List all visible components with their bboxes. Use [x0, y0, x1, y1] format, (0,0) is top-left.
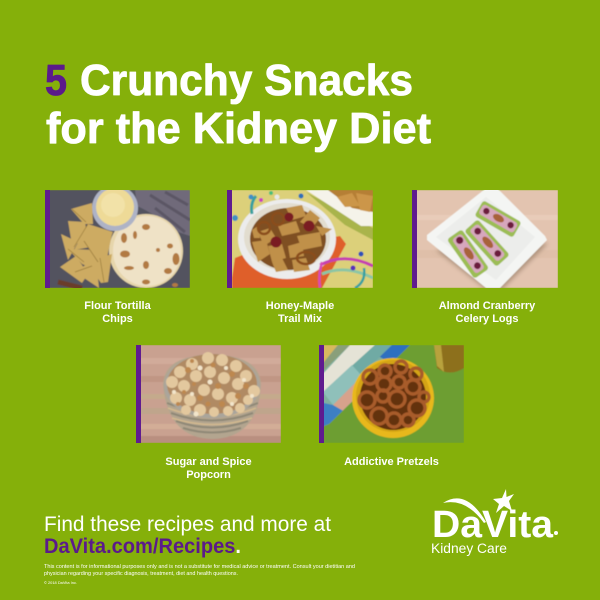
disclaimer — [44, 564, 355, 577]
caption: honey-maple trail mix: Honey-Maple — [266, 300, 334, 312]
accent bar — [45, 190, 50, 288]
plaid cloth — [324, 345, 410, 427]
chips — [60, 203, 113, 288]
photo: honey-maple trail mix — [227, 190, 373, 288]
copyright: © 2018 DaVita Inc. — [44, 580, 77, 585]
caption: flour tortilla chips: Flour Tortilla — [84, 300, 152, 312]
photo: sugar and spice popcorn — [136, 345, 281, 443]
caption: addictive pretzels: Addictive Pretzels — [344, 456, 439, 468]
tray — [306, 190, 373, 226]
ribbons — [320, 259, 373, 266]
photo: flour tortilla chips — [45, 185, 190, 288]
logo registered mark — [554, 531, 558, 535]
accent bar — [227, 190, 232, 288]
plate shadow — [436, 242, 548, 288]
call to action: Find these recipes and more at — [44, 513, 331, 536]
photo: addictive pretzels — [319, 345, 464, 443]
photo: almond cranberry celery logs — [417, 190, 558, 288]
celery log 2 — [464, 219, 510, 267]
title: 5 — [45, 56, 67, 105]
logo wordmark: DaVita — [432, 504, 554, 546]
caption: sugar and spice popcorn: Sugar and Spice — [165, 456, 252, 468]
disclaimer: physician regarding your specific diagnosis, treatment, diet and health questions. — [44, 571, 238, 577]
celery log 3 — [447, 229, 489, 279]
title: Crunchy Snacks — [80, 56, 413, 105]
caption line 2: Chips — [102, 313, 133, 325]
caption line 2: Celery Logs — [456, 313, 518, 325]
recipes link: DaVita.com/Recipes. — [44, 535, 241, 558]
logo star — [493, 489, 514, 513]
caption: almond cranberry celery logs: Almond Cranberry — [439, 300, 536, 312]
title — [45, 56, 431, 153]
accent bar — [136, 345, 141, 443]
celery log 1 — [474, 200, 522, 238]
plate — [427, 189, 547, 288]
bowl — [163, 355, 261, 439]
caption line 2: Trail Mix — [278, 313, 323, 325]
tortilla — [109, 214, 183, 288]
caption line 2: Popcorn — [186, 469, 231, 481]
logo swoosh — [443, 498, 486, 523]
accent bar — [319, 345, 324, 443]
accent bar — [412, 190, 417, 288]
logo: DaVita Kidney Care — [431, 489, 558, 556]
bowl — [92, 185, 138, 231]
glass — [434, 345, 464, 372]
bowl — [238, 199, 336, 279]
pretzels — [359, 361, 429, 427]
logo sub-brand: Kidney Care — [431, 541, 507, 556]
disclaimer: This content is for informational purposes only and is not a substitute for medical advice or treatment. Consult your dietitian and — [44, 564, 355, 570]
bowl — [352, 358, 434, 438]
title: for the Kidney Diet — [46, 104, 431, 153]
popcorn — [166, 352, 260, 417]
napkin — [232, 236, 346, 288]
